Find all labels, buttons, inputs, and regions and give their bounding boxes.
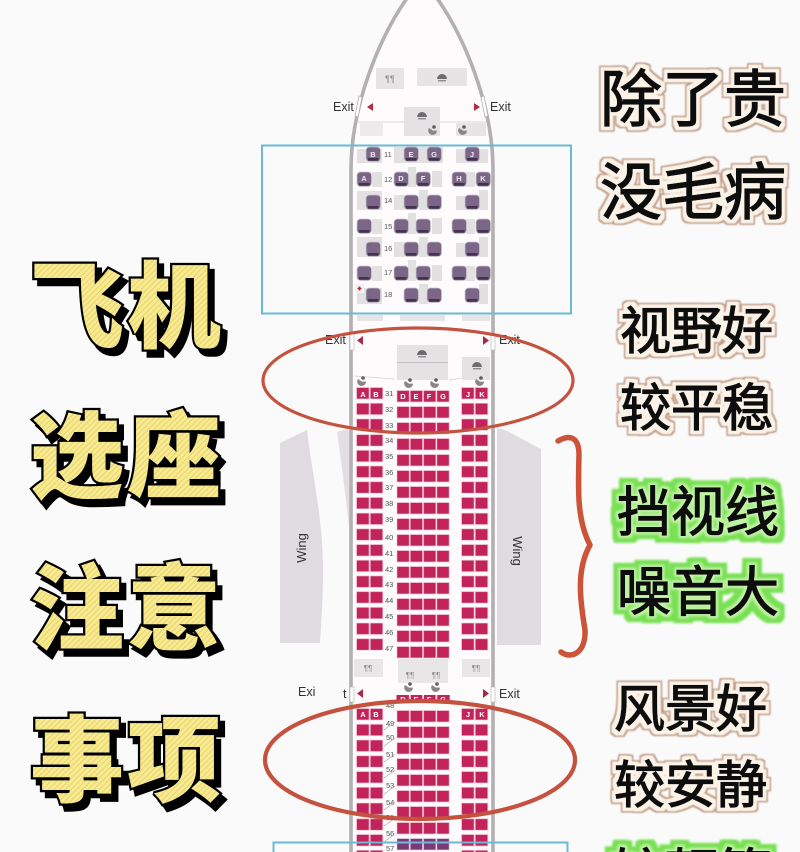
front cabin seat letters: D (400, 392, 406, 401)
front cabin row numbers: 37 (385, 483, 393, 492)
left wing: Wing (294, 533, 309, 563)
front cabin seat letters: E (413, 392, 419, 401)
front exits (333, 96, 511, 117)
seat consoles (357, 147, 488, 304)
rear exits: t (343, 687, 347, 701)
front cabin row numbers: 46 (385, 628, 393, 637)
red ellipse: behind wing (265, 701, 575, 819)
rear cabin row numbers: 48 (386, 701, 394, 710)
front cabin seat letters (360, 390, 485, 401)
front cabin row numbers: 31 (385, 389, 393, 398)
rear cabin row numbers: 56 (386, 829, 394, 838)
front galley and lavatory: ¶¶ (385, 74, 395, 84)
row 11 seats: B (370, 150, 376, 159)
rear lavatories: ¶¶ (364, 664, 372, 673)
mid exits: Exit (325, 333, 346, 347)
rear cabin seat letters: J (466, 710, 470, 719)
front cabin row numbers (385, 389, 393, 653)
medical icon (355, 284, 364, 293)
business row numbers: 12 (384, 175, 392, 184)
front cabin row numbers: 41 (385, 549, 393, 558)
rear cabin seat letters: D (400, 695, 406, 704)
rear lavatories: ¶¶ (406, 671, 414, 680)
rear cabin row numbers: 49 (386, 719, 394, 728)
row 12 seats: F (421, 174, 426, 183)
mid exits (325, 333, 520, 350)
front cabin seat letters: J (466, 390, 470, 399)
front cabin row numbers: 38 (385, 499, 393, 508)
rear exits (298, 685, 520, 702)
front cabin row numbers: 34 (385, 436, 393, 445)
front exits: Exit (490, 100, 511, 114)
rear lavatories: ¶¶ (432, 671, 440, 680)
row 12 seats: H (456, 174, 462, 183)
mid exits: Exit (499, 333, 520, 347)
row 12 seats (357, 172, 490, 186)
front cabin row numbers: 35 (385, 452, 393, 461)
title: 飞机选座注意事项 (30, 255, 224, 814)
title line 3: 注意 (30, 557, 224, 662)
note: over wing: 噪音大 (617, 563, 779, 623)
mid galleys (354, 345, 490, 388)
business row numbers: 15 (384, 222, 392, 231)
note: business class: 除了贵 (600, 66, 786, 135)
rear cabin seat letters: B (373, 710, 379, 719)
blue box: business cabin (262, 146, 571, 314)
front cabin seat letters: F (427, 392, 432, 401)
front cabin row numbers: 39 (385, 515, 393, 524)
rear cabin row numbers: 51 (386, 750, 394, 759)
front cabin row numbers: 45 (385, 612, 393, 621)
economy seats, rear cabin (356, 695, 488, 852)
rear exits: Exi (298, 685, 315, 699)
title line 4: 事项 (30, 709, 224, 814)
economy seats, front cabin (356, 387, 488, 662)
front cabin seat letters: K (479, 390, 485, 399)
rear cabin seat letters: G (440, 695, 446, 704)
rear cabin row numbers: 50 (386, 733, 394, 742)
rear lavatories: ¶¶ (472, 664, 480, 673)
front cabin row numbers: 40 (385, 533, 393, 542)
front cabin row numbers: 36 (385, 468, 393, 477)
front cabin row numbers: 33 (385, 421, 393, 430)
blue box: rear cabin (274, 842, 568, 852)
business row numbers: 11 (384, 150, 392, 159)
front cabin row numbers: 47 (385, 644, 393, 653)
front cabin seat letters: B (373, 390, 379, 399)
front cabin row numbers: 32 (385, 405, 393, 414)
business row numbers (384, 150, 392, 299)
rear lavatories (354, 659, 490, 692)
business row numbers: 16 (384, 244, 392, 253)
rear cabin seat letters: K (479, 710, 485, 719)
note: front of wing: 视野好 (620, 303, 773, 360)
note: behind wing: 风景好 (614, 681, 767, 738)
row 12 seats: D (398, 174, 404, 183)
front exits: Exit (333, 100, 354, 114)
note: behind wing: 较安静 (614, 757, 767, 814)
mid bulkhead (357, 315, 490, 321)
rear cabin row numbers: 52 (386, 765, 394, 774)
row 11 seats: G (431, 150, 437, 159)
business row numbers: 14 (384, 196, 392, 205)
row 11 seats (366, 147, 480, 162)
note: business class (600, 66, 786, 228)
front cabin row numbers: 44 (385, 596, 393, 605)
rear cabin seat letters (360, 695, 485, 719)
front cabin seat letters: A (360, 390, 366, 399)
rear cabin row numbers (386, 701, 394, 852)
business row numbers: 17 (384, 268, 392, 277)
rear cabin seat letters: A (360, 710, 366, 719)
right wing (497, 428, 541, 645)
front cabin row numbers: 43 (385, 580, 393, 589)
row 12 seats: K (480, 174, 486, 183)
rows 14 to 18 seats (357, 195, 490, 302)
rear exits: Exit (499, 687, 520, 701)
note: front of wing (620, 303, 773, 437)
rear cabin seat letters: E (413, 695, 419, 704)
rear cabin row numbers: 53 (386, 781, 394, 790)
fuselage outline (351, 0, 493, 852)
front cabin seat letters: G (440, 392, 446, 401)
row 12 seats: A (361, 174, 367, 183)
note: over wing: 挡视线 (617, 483, 779, 543)
left wing (280, 428, 349, 643)
row 11 seats: J (470, 150, 474, 159)
title line 1: 飞机 (30, 255, 224, 360)
rear cabin row numbers: 54 (386, 798, 394, 807)
rear cabin row numbers: 55 (386, 813, 394, 822)
note: front of wing: 较平稳 (620, 380, 773, 437)
note: over wing (617, 483, 779, 623)
front cabin row numbers: 42 (385, 565, 393, 574)
row 11 seats: E (408, 150, 414, 159)
red ellipse: front of wing (263, 328, 573, 433)
note: business class: 没毛病 (600, 159, 786, 228)
right wing: Wing (510, 536, 525, 566)
title line 2: 选座 (30, 405, 224, 510)
business class seats (355, 147, 490, 304)
business row numbers: 18 (384, 290, 392, 299)
note: behind wing (614, 681, 767, 814)
front galley and lavatory (356, 68, 487, 136)
curly brace: wing zone (558, 438, 590, 655)
rear cabin seat letters: F (427, 695, 432, 704)
